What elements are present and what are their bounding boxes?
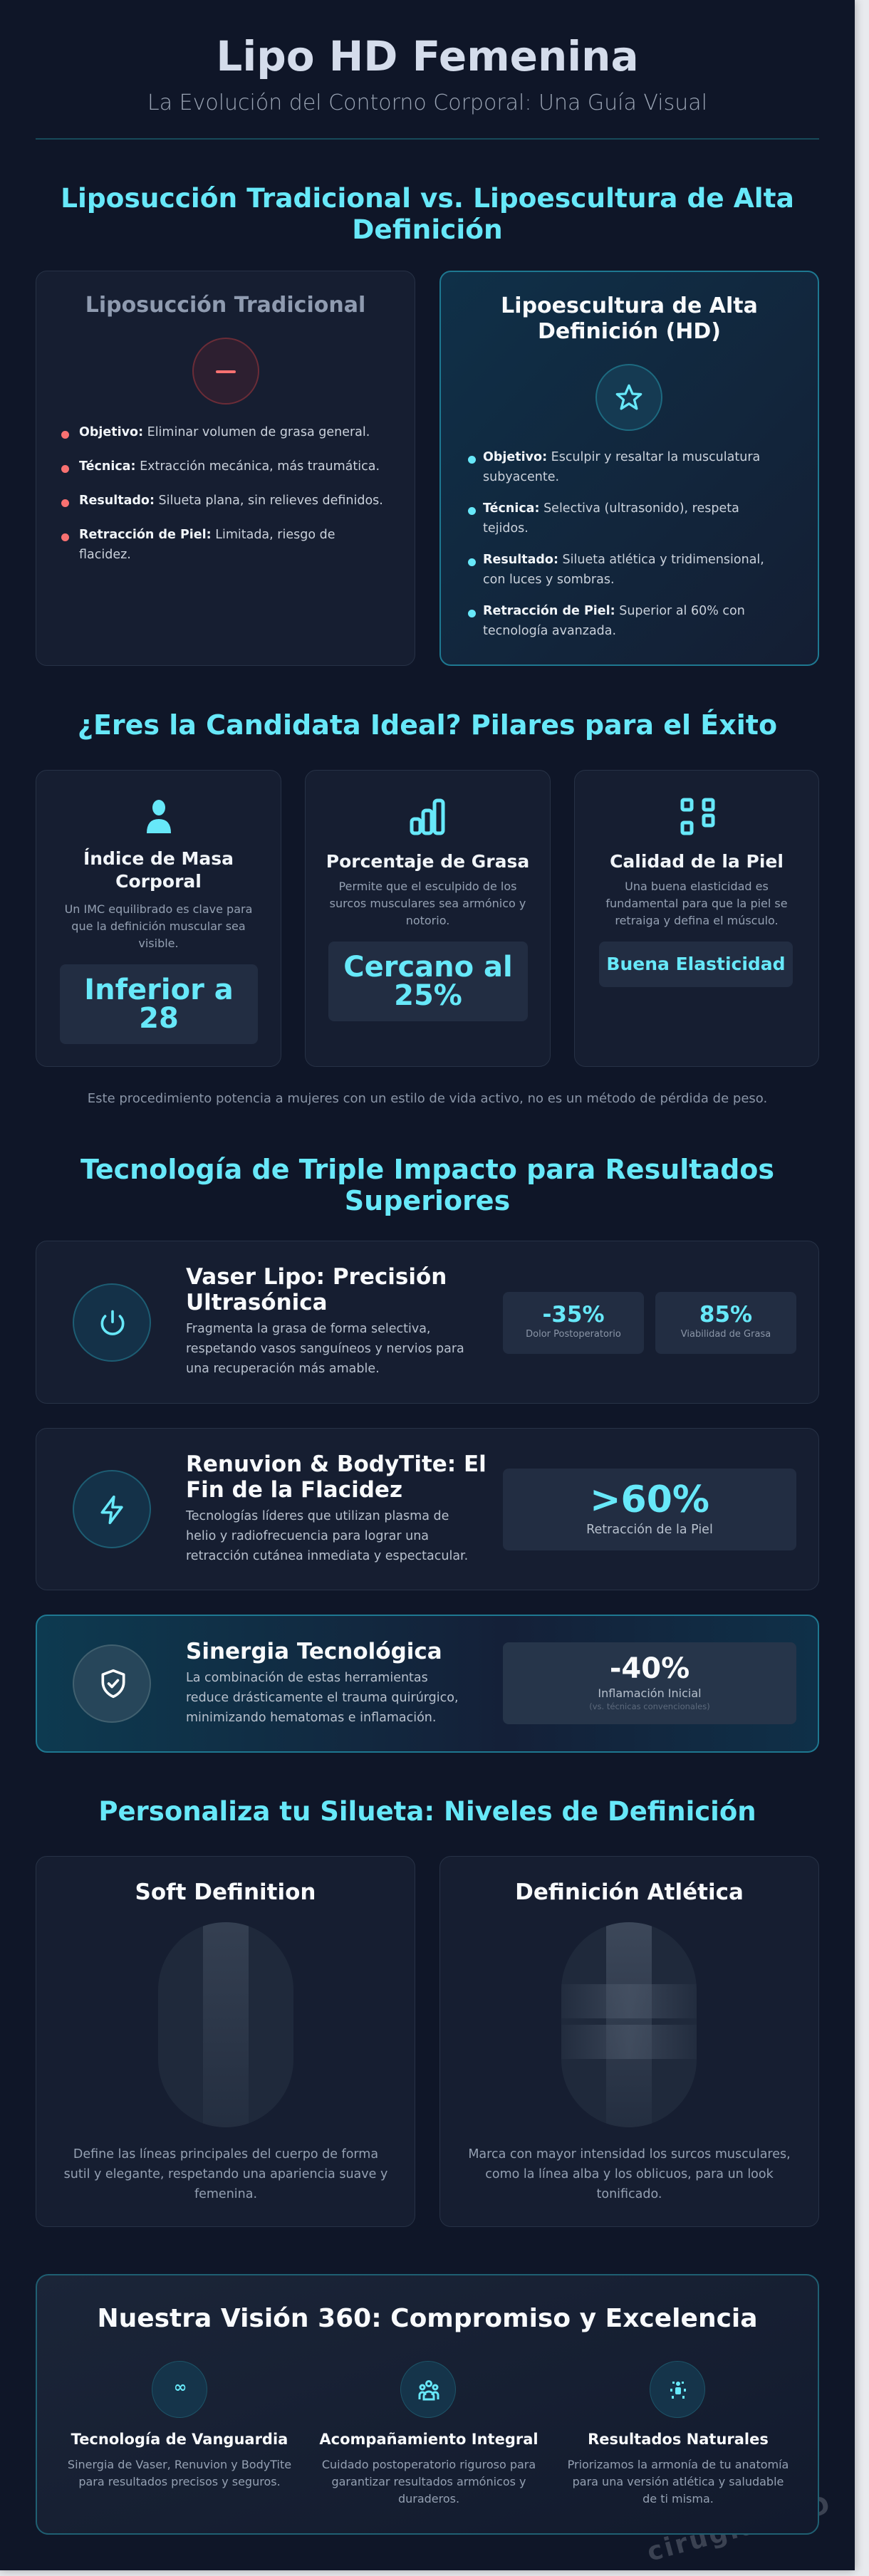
panel: sinergia — [36, 1615, 819, 1753]
heading: comparison: Liposucción Tradicional vs. Lipoescultura de Alta Definición — [61, 182, 794, 245]
icon: person — [147, 800, 171, 833]
text: renuvion — [185, 1451, 486, 1563]
value: piel: Buena Elasticidad — [606, 954, 786, 974]
item: vanguardia: ∞ — [174, 2379, 187, 2397]
footnote: Este procedimiento potencia a mujeres con un estilo de vida activo, no es un método de pérdida de peso. — [88, 1091, 767, 1106]
text: athletic: Marca con mayor intensidad los surcos musculares, como la línea alba y los oblicuos, para un look tonificado. — [468, 2147, 791, 2201]
heading: soft: Soft Definition — [135, 1879, 316, 1905]
list: traditional: Resultado: Silueta plana, sin relieves definidos. — [79, 494, 383, 508]
list: traditional: Técnica: Extracción mecánica, más traumática. — [79, 459, 380, 474]
panel: renuvion — [36, 1428, 819, 1590]
list: HD: Técnica: Selectiva (ultrasonido), respeta tejidos. — [483, 501, 739, 536]
panel: IMC: Un IMC equilibrado es clave para que la definición muscular sea visible. — [65, 902, 252, 950]
text: renuvion: Tecnologías líderes que utilizan plasma de helio y radiofrecuencia para lograr una retracción cutánea inmediata y espectacular. — [186, 1509, 468, 1563]
figure: athletic silhouette — [561, 1922, 697, 2127]
value: grasa: Cercano al — [343, 951, 513, 984]
list: HD: Resultado: Silueta atlética y tridimensional, con luces y sombras. — [483, 553, 764, 587]
stat: viabilidad: Viabilidad de Grasa — [681, 1329, 771, 1340]
stat: retraccion: Retracción de la Piel — [586, 1523, 713, 1537]
text: IMC — [83, 848, 234, 892]
item: vanguardia: Sinergia de Vaser, Renuvion y BodyTite para resultados precisos y seguros. — [68, 2458, 291, 2488]
heading: traditional: Liposucción Tradicional — [85, 293, 365, 318]
item: vanguardia: Tecnología de Vanguardia — [71, 2431, 288, 2448]
icon: bolt — [73, 1470, 151, 1548]
subtitle: La Evolución del Contorno Corporal: Una Guía Visual — [147, 90, 707, 115]
panel: HD — [439, 271, 819, 666]
text: sinergia: La combinación de estas herramientas reduce drásticamente el trauma quirúrgico, minimizando hematomas e inflamación. — [186, 1671, 459, 1725]
list: HD: Retracción de Piel: Superior al 60% con tecnología avanzada. — [483, 604, 745, 638]
list: traditional: Retracción de Piel: Limitada, riesgo de flacidez. — [79, 528, 335, 562]
item: acompanamiento: Acompañamiento Integral — [319, 2431, 538, 2448]
value: grasa: 25% — [394, 979, 462, 1012]
value: piel — [599, 942, 793, 987]
text: renuvion: Renuvion & BodyTite: El Fin de la Flacidez — [186, 1451, 486, 1503]
stat: viabilidad — [655, 1292, 796, 1354]
text: vaser — [186, 1264, 464, 1376]
panel: traditional — [36, 271, 415, 666]
title: Lipo HD Femenina — [216, 32, 639, 80]
panel: IMC — [36, 770, 281, 1067]
heading: HD: Definición (HD) — [538, 319, 721, 344]
stat: dolor: -35% — [542, 1302, 605, 1328]
panel: grasa: Permite que el esculpido de los surcos musculares sea armónico y notorio. — [330, 880, 526, 927]
item: vanguardia — [68, 2361, 291, 2488]
icon: power — [73, 1283, 151, 1362]
panel: vaser — [36, 1241, 819, 1404]
icon: star — [595, 364, 662, 431]
value: IMC — [60, 964, 258, 1044]
figure: soft silhouette — [158, 1922, 293, 2127]
item: acompanamiento: Cuidado postoperatorio riguroso para garantizar resultados armónicos y duraderos. — [322, 2458, 536, 2505]
stat: retraccion — [503, 1469, 796, 1550]
text: sinergia: Sinergia Tecnológica — [186, 1639, 442, 1664]
text: vaser: Fragmenta la grasa de forma selectiva, respetando vasos sanguíneos y nervios para una recuperación más amable. — [186, 1322, 464, 1376]
panel: piel — [574, 770, 819, 1067]
heading: athletic: Definición Atlética — [515, 1879, 744, 1905]
stat: inflamacion: (vs. técnicas convencionales) — [589, 1701, 710, 1711]
text: piel: Calidad de la Piel — [610, 851, 784, 872]
heading: technology: Tecnología de Triple Impacto para Resultados Superiores — [80, 1154, 774, 1216]
panel: grasa — [305, 770, 551, 1067]
stat: inflamacion: Inflamación Inicial — [598, 1686, 702, 1700]
icon: grid — [681, 798, 715, 835]
heading: vision: Nuestra Visión 360: Compromiso y Excelencia — [97, 2304, 758, 2333]
icon: bars — [410, 799, 444, 835]
stat: viabilidad: 85% — [699, 1302, 752, 1328]
text: vaser: Vaser Lipo: Precisión Ultrasónica — [186, 1264, 447, 1315]
stat: dolor: Dolor Postoperatorio — [526, 1329, 621, 1340]
text: IMC: Corporal — [115, 871, 202, 892]
heading: HD — [501, 293, 758, 344]
icon: shield — [73, 1644, 151, 1723]
item: naturales — [568, 2361, 789, 2505]
value: grasa — [328, 942, 528, 1021]
heading: candidate: ¿Eres la Candidata Ideal? Pilares para el Éxito — [78, 709, 777, 741]
value: IMC: 28 — [139, 1002, 179, 1035]
text: IMC: Índice de Masa — [83, 848, 234, 869]
panel: athletic — [439, 1856, 819, 2227]
heading: HD: Lipoescultura de Alta — [501, 293, 758, 318]
panel: soft — [36, 1856, 415, 2227]
value: IMC: Inferior a — [84, 974, 234, 1006]
list: traditional — [61, 425, 383, 562]
watermark: cirugías HD — [644, 2490, 835, 2567]
stat: inflamacion — [503, 1642, 796, 1724]
stat: inflamacion: -40% — [610, 1652, 690, 1685]
panel: piel: Una buena elasticidad es fundamental para que la piel se retraiga y defina el músculo. — [605, 880, 788, 927]
panel: vision 360 — [36, 2274, 819, 2535]
list: HD — [468, 450, 764, 638]
text: grasa: Porcentaje de Grasa — [326, 851, 529, 872]
item: acompanamiento — [319, 2361, 538, 2505]
item: naturales: Resultados Naturales — [588, 2431, 769, 2448]
stat: retraccion: >60% — [590, 1479, 709, 1521]
list: traditional: Objetivo: Eliminar volumen de grasa general. — [79, 425, 370, 439]
list: HD: Objetivo: Esculpir y resaltar la musculatura subyacente. — [483, 450, 760, 484]
text: sinergia — [186, 1639, 459, 1725]
item: naturales: Priorizamos la armonía de tu anatomía para una versión atlética y saludable de ti misma. — [568, 2458, 789, 2505]
icon: minus — [192, 338, 259, 405]
stat: dolor — [503, 1292, 644, 1354]
text: soft: Define las líneas principales del cuerpo de forma sutil y elegante, respetando una apariencia suave y femenina. — [64, 2147, 387, 2201]
heading: levels: Personaliza tu Silueta: Niveles de Definición — [98, 1796, 756, 1827]
